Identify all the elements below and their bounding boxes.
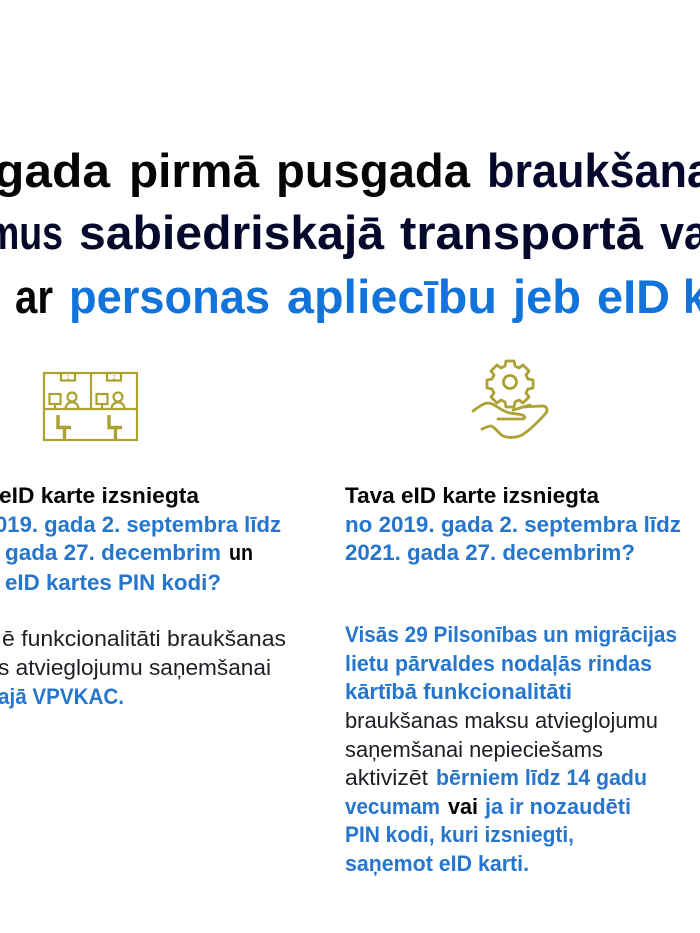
title line 1: pusgada (276, 144, 471, 197)
left column answer: ajā VPVKAC. (0, 684, 124, 709)
right column answer: saņemot eID karti. (345, 851, 529, 876)
title line 3: ar (15, 270, 53, 323)
left column question: eID kartes PIN kodi? (5, 570, 221, 595)
right column question: no 2019. gada 2. septembra līdz (345, 512, 681, 537)
left column question: un (229, 540, 253, 565)
title line 2: transportā (400, 206, 644, 259)
title line 2: sabiedriskajā (79, 206, 385, 259)
right column answer: bērniem līdz 14 gadu (436, 765, 647, 790)
right column answer: lietu pārvaldes nodaļās rindas (345, 651, 652, 676)
left column question: gada 27. decembrim (5, 540, 221, 565)
right column answer (345, 622, 677, 876)
right column answer: aktivizēt (345, 765, 428, 790)
icon: service desk counters (44, 373, 137, 440)
title (0, 144, 700, 323)
right column answer: kārtībā funkcionalitāti (345, 679, 572, 704)
icon: hand holding gear (473, 361, 547, 437)
right column answer: vai (448, 794, 478, 819)
title line 3: eID (597, 270, 670, 323)
right column answer: Visās 29 Pilsonības un migrācijas (345, 622, 677, 647)
right column answer: vecumam (345, 794, 440, 819)
title line 1: pirmā (129, 144, 260, 197)
right column question (345, 483, 681, 565)
right column answer: saņemšanai nepieciešams (345, 737, 603, 762)
title line 2 (0, 206, 700, 259)
title line 1 (0, 144, 700, 197)
left column question (0, 483, 281, 595)
right column question: 2021. gada 27. decembrim? (345, 540, 635, 565)
title line 3: apliecību (287, 270, 497, 323)
left column answer: ē funkcionalitāti braukšanas (2, 626, 286, 651)
right column answer: PIN kodi, kuri izsniegti, (345, 822, 574, 847)
left column answer (0, 626, 286, 709)
desk number 2: 2 (112, 376, 116, 382)
left column question: eID karte izsniegta (0, 483, 200, 508)
right column answer: ja ir nozaudēti (484, 794, 631, 819)
title line 3: personas (69, 270, 270, 323)
desk number 1: 1 (66, 376, 70, 382)
right column question: Tava eID karte izsniegta (345, 483, 600, 508)
title line 3: jeb (512, 270, 581, 323)
right column answer: braukšanas maksu atvieglojumu (345, 708, 658, 733)
title line 3 (15, 270, 700, 323)
left column answer: s atvieglojumu saņemšanai (0, 655, 271, 680)
left column question: 019. gada 2. septembra līdz (0, 512, 281, 537)
